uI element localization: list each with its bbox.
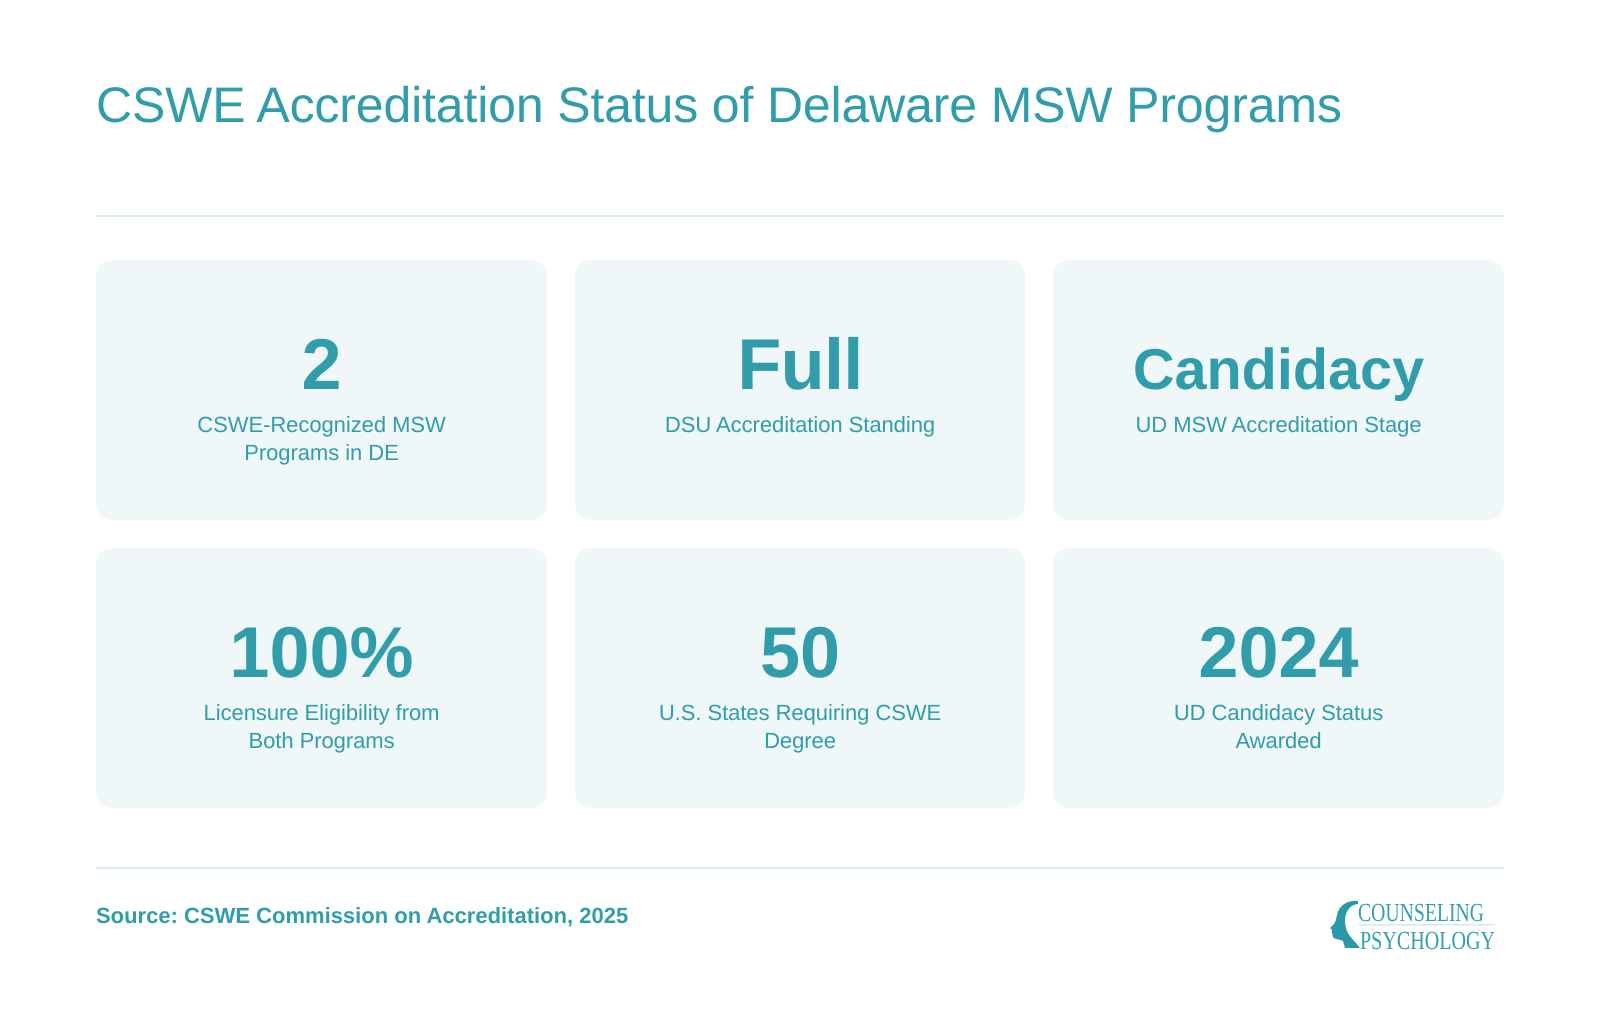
stat value: 100%: 100%	[229, 613, 414, 693]
panel: DSU standing	[575, 260, 1025, 520]
stat label: programs	[197, 412, 446, 465]
icon: head profile	[1330, 901, 1360, 948]
stat value: Candidacy: Candidacy	[1133, 338, 1424, 402]
stat value: 2: 2	[301, 325, 342, 405]
stat label: licensure: Both Programs	[248, 728, 395, 753]
title: CSWE Accreditation Status of Delaware MSW Programs	[96, 77, 1342, 133]
stat label: programs: CSWE-Recognized MSW	[197, 412, 446, 436]
stat label: year: UD Candidacy Status	[1174, 700, 1383, 724]
panel: licensure eligibility	[96, 548, 547, 808]
stat label: UD stage: UD MSW Accreditation Stage	[1135, 412, 1422, 436]
stat label: states: U.S. States Requiring CSWE	[659, 700, 941, 724]
stat value: Full: Full	[737, 325, 863, 405]
panel: candidacy year	[1053, 548, 1504, 808]
stat label: states	[659, 700, 941, 753]
panel: states requiring degree	[575, 548, 1025, 808]
panel: UD stage	[1053, 260, 1504, 520]
stat label: DSU standing: DSU Accreditation Standing	[665, 412, 935, 436]
stat value: 2024: 2024	[1198, 613, 1359, 693]
stat label: programs: Programs in DE	[244, 440, 399, 465]
stat label: year	[1174, 700, 1383, 753]
stat value: 50: 50	[760, 613, 840, 693]
source note: Source: CSWE Commission on Accreditation, 2025	[96, 903, 628, 928]
stat label: states: Degree	[764, 728, 836, 753]
stat label: year: Awarded	[1235, 728, 1322, 753]
stat label: licensure	[204, 700, 439, 753]
stat label: licensure: Licensure Eligibility from	[204, 700, 439, 724]
panel: CSWE-recognized programs	[96, 260, 547, 520]
logo wordmark	[1358, 898, 1495, 955]
logo: Counseling Psychology	[1330, 898, 1495, 955]
